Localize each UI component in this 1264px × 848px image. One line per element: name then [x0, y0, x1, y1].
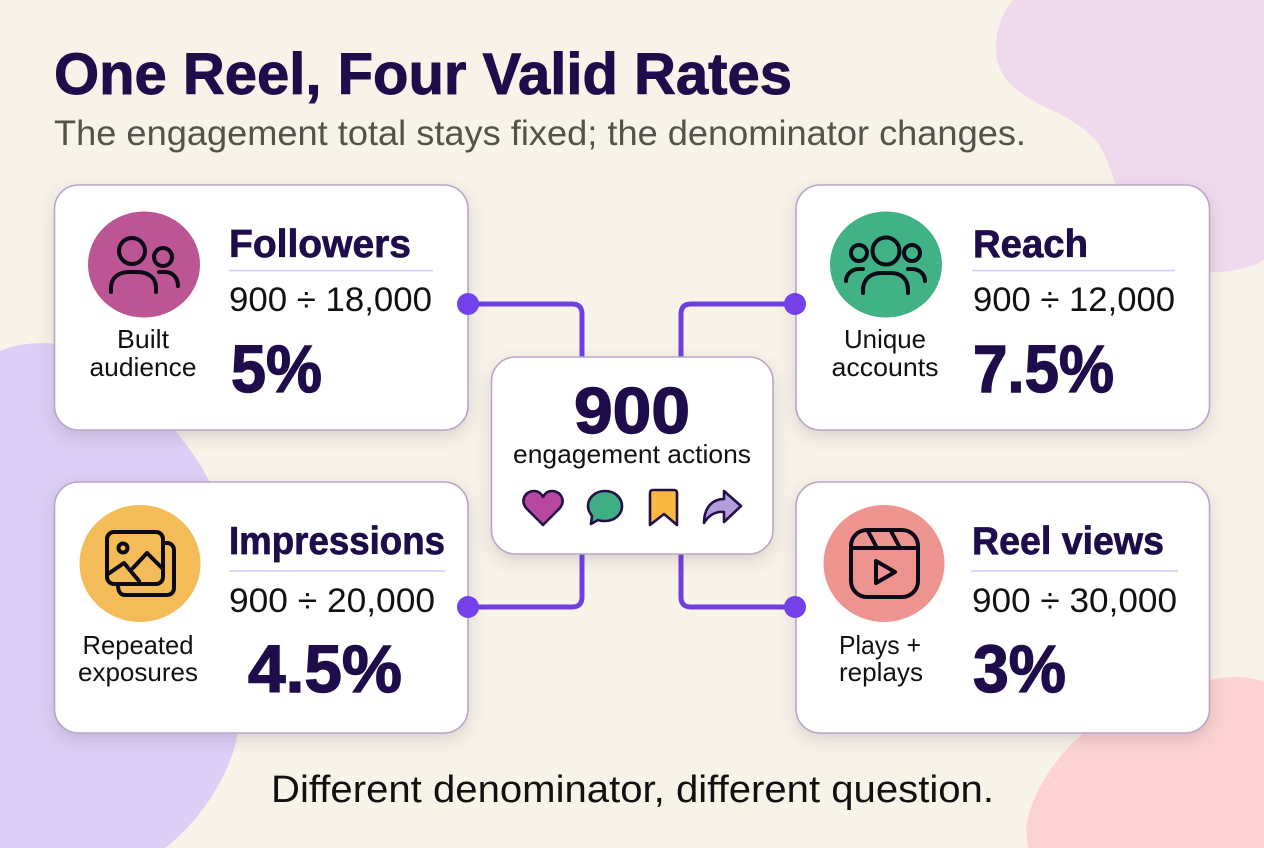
- label: unique accounts: Unique: [844, 324, 926, 354]
- heading: reel views: Reel views: [972, 520, 1164, 563]
- rate: reel views: 3%: [973, 632, 1066, 707]
- label: built audience: audience: [90, 352, 196, 382]
- label: plays + replays: Plays +: [839, 630, 921, 660]
- label: unique accounts: accounts: [832, 352, 938, 382]
- rate: followers: 5%: [231, 332, 322, 407]
- icon: followers: [88, 212, 200, 318]
- panel: reel views: [796, 482, 1210, 733]
- label: unique accounts: [832, 324, 938, 382]
- total label: engagement actions: [513, 439, 751, 469]
- icon: impressions: [80, 505, 200, 622]
- background blob: bottom right coral: [1026, 677, 1264, 848]
- label: repeated exposures: exposures: [78, 657, 198, 687]
- label: plays + replays: replays: [839, 657, 923, 687]
- footer statement: Different denominator, different question.: [271, 769, 994, 811]
- total number: 900: [574, 374, 690, 447]
- title: One Reel, Four Valid Rates: [54, 42, 792, 107]
- label: repeated exposures: [78, 630, 198, 687]
- panel: reach: [796, 185, 1210, 430]
- calculation: impressions: 900 ÷ 20,000: [229, 582, 435, 620]
- icon: heart: [523, 491, 563, 525]
- panel: followers: [54, 185, 468, 430]
- connectors: [468, 304, 795, 607]
- label: repeated exposures: Repeated: [82, 630, 194, 660]
- calculation: reel views: 900 ÷ 30,000: [972, 582, 1177, 620]
- background blob: top right pink: [996, 0, 1264, 272]
- icon: reel views: [824, 505, 944, 622]
- label: built audience: [90, 324, 196, 382]
- calculation: followers: 900 ÷ 18,000: [229, 281, 432, 319]
- panel: centre total: [492, 357, 773, 554]
- label: plays + replays: [839, 630, 923, 687]
- panel: impressions: [54, 482, 468, 733]
- subtitle: The engagement total stays fixed; the denominator changes.: [54, 114, 1026, 153]
- label: built audience: Built: [117, 324, 170, 354]
- icon: reach: [830, 212, 942, 318]
- rate: reach: 7.5%: [973, 332, 1114, 407]
- calculation: reach: 900 ÷ 12,000: [973, 281, 1175, 319]
- background blob: left lavender: [0, 343, 246, 848]
- icon: bookmark: [650, 490, 677, 525]
- rate: impressions: 4.5%: [248, 632, 402, 707]
- heading: followers: Followers: [229, 223, 411, 266]
- heading: reach: Reach: [973, 223, 1088, 266]
- icon: comment: [588, 491, 622, 524]
- icon: share: [704, 491, 741, 523]
- connector dots: [457, 293, 806, 618]
- heading: impressions: Impressions: [229, 520, 445, 563]
